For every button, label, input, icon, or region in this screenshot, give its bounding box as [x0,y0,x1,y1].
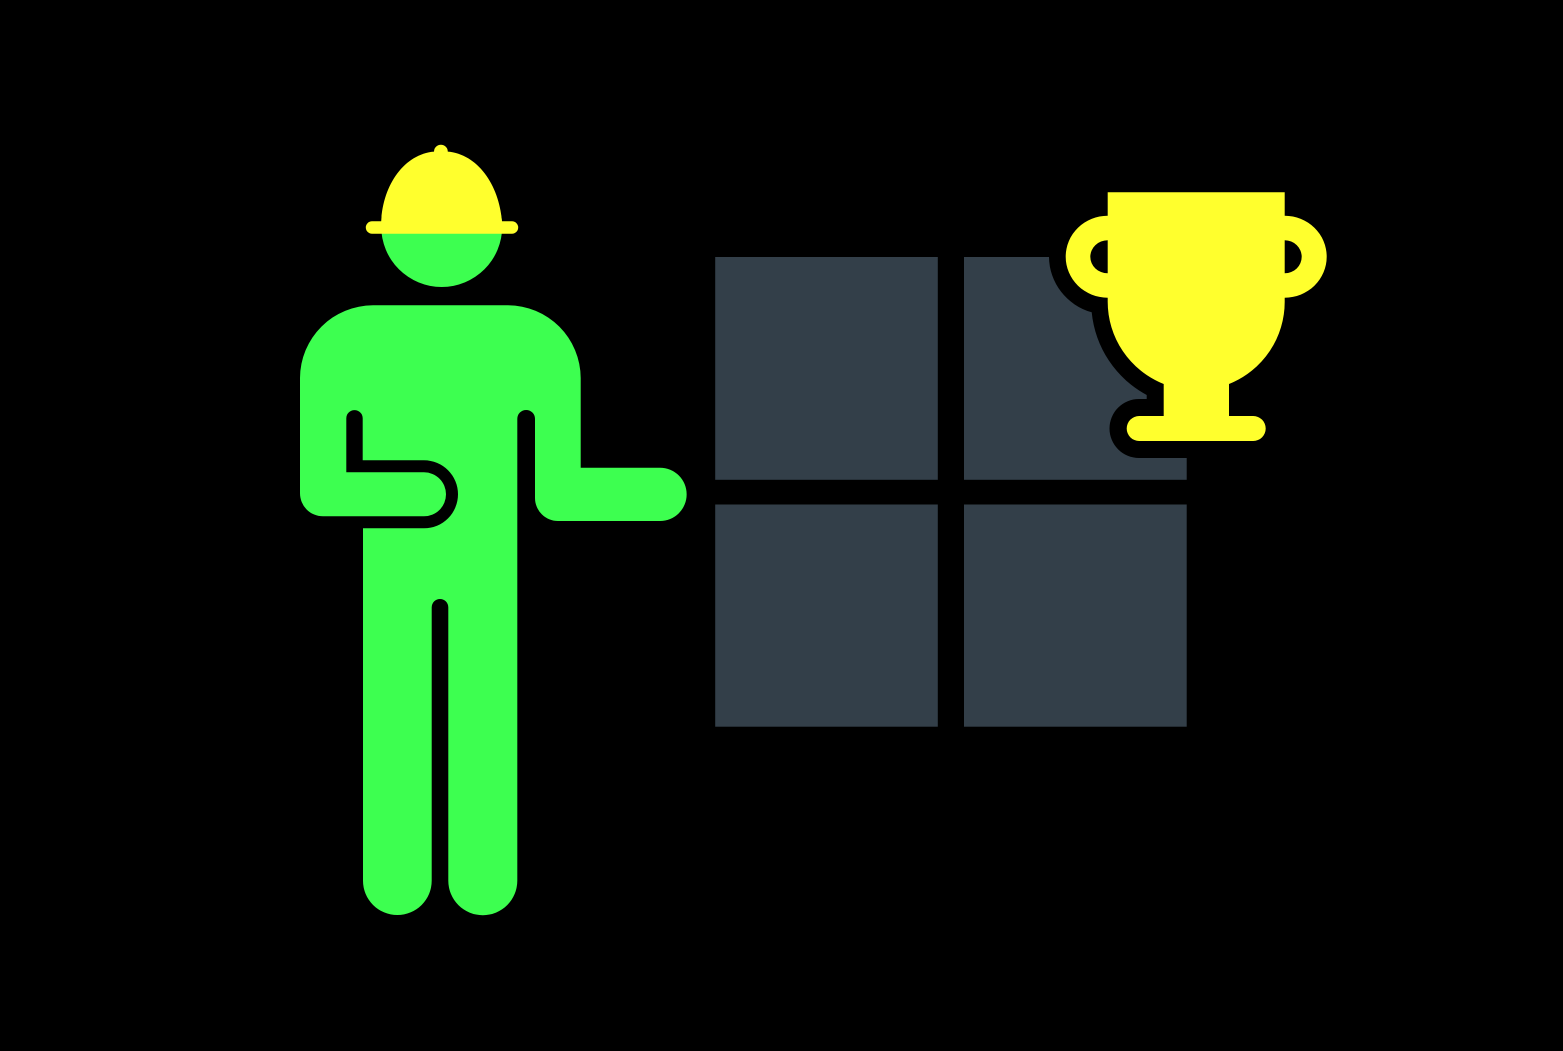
worker hard hat [366,145,518,234]
worker body [300,305,687,915]
trophy cup [1066,192,1327,441]
icon: worker figure [300,145,687,915]
icon: window grid [715,257,1187,727]
trophy outline against window [1049,256,1188,458]
worker head [381,166,502,287]
icon: trophy [1049,192,1327,458]
